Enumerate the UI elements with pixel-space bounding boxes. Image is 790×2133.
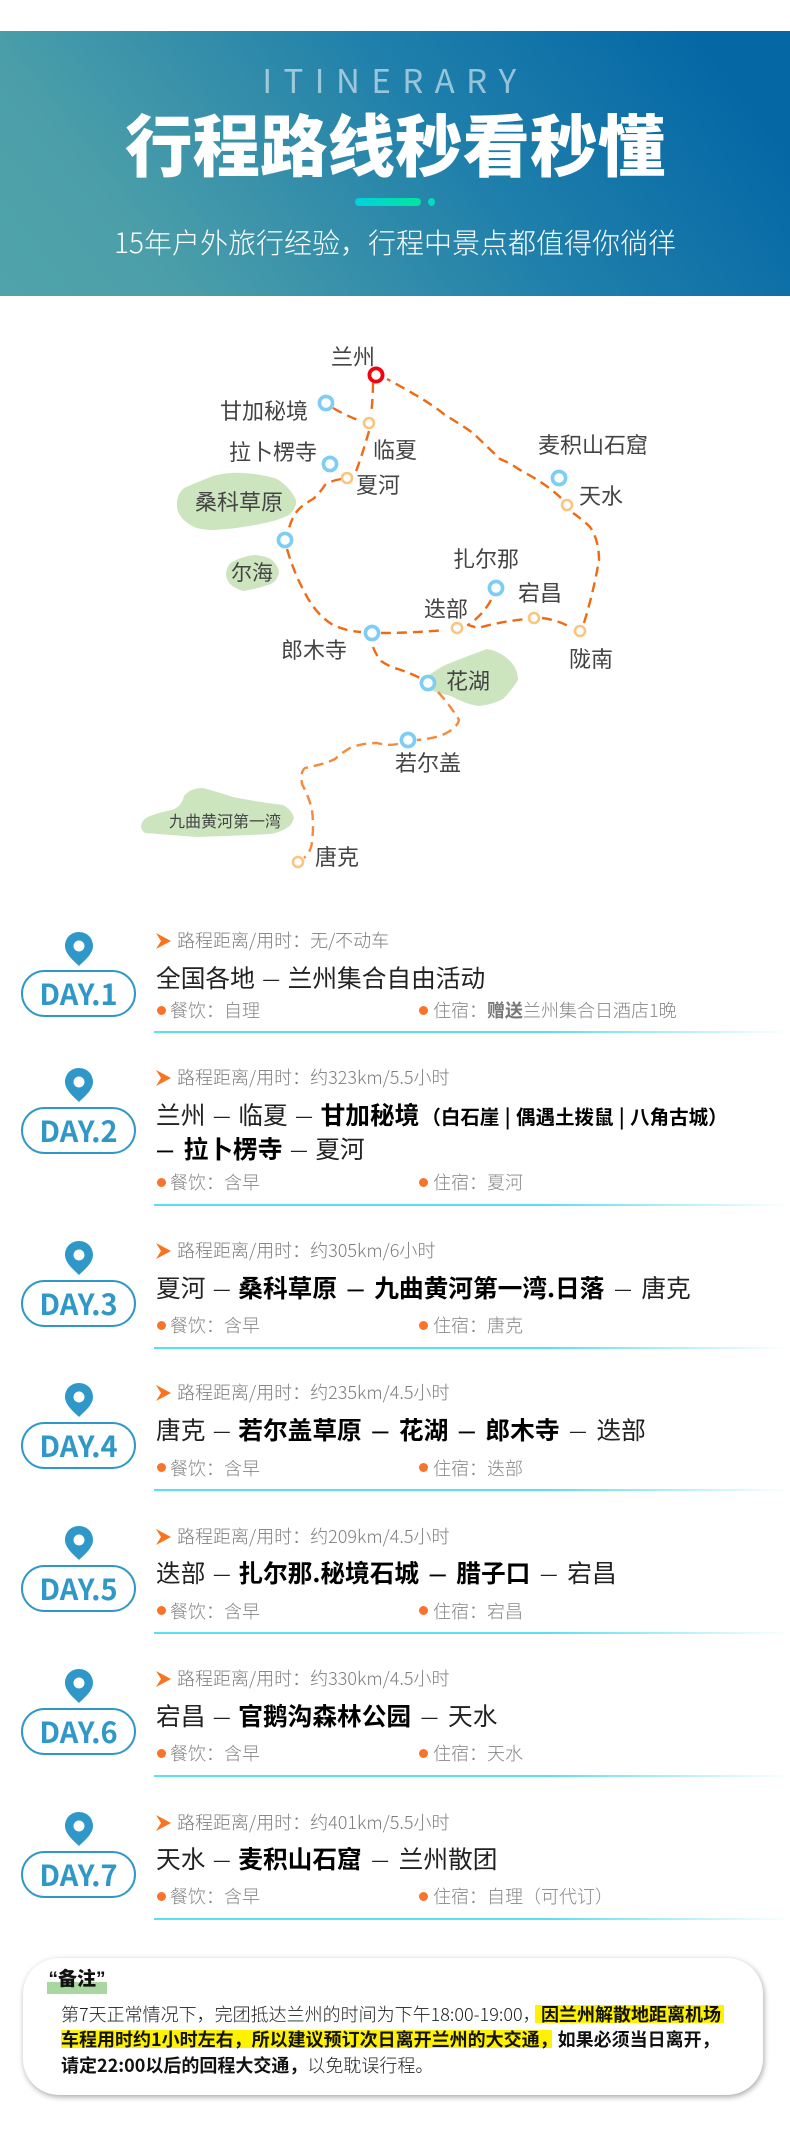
stay dot bbox=[419, 1749, 428, 1758]
panel: day 3 bbox=[21, 1237, 778, 1349]
itinerary: — bbox=[213, 1844, 231, 1873]
icon: arrow bbox=[156, 1671, 171, 1687]
lodging: 住宿：夏河 bbox=[433, 1169, 523, 1195]
route distance: 路程距离/用时：约305km/6小时 bbox=[177, 1237, 435, 1263]
label: 天水: 天水 bbox=[579, 479, 623, 511]
icon: location pin bbox=[65, 1068, 93, 1102]
lodging: 住宿：自理（可代订） bbox=[433, 1883, 613, 1909]
meal dot bbox=[157, 1006, 166, 1015]
accent bar bbox=[355, 198, 421, 206]
itinerary: — bbox=[569, 1415, 587, 1444]
itinerary: — bbox=[614, 1273, 632, 1302]
icon: location pin bbox=[65, 1669, 93, 1703]
node: 尔海 bbox=[278, 533, 292, 547]
panel: day 7 bbox=[21, 1809, 778, 1920]
itinerary line 2: 拉卜楞寺 夏河 bbox=[184, 1130, 365, 1166]
meal dot bbox=[157, 1606, 166, 1615]
itinerary: — bbox=[213, 1415, 231, 1444]
label: 郎木寺: 郎木寺 bbox=[281, 633, 347, 665]
itinerary: — bbox=[371, 1415, 389, 1444]
itinerary: 夏河 桑科草原 九曲黄河第一湾.日落 唐克 bbox=[156, 1269, 691, 1305]
meal dot bbox=[157, 1321, 166, 1330]
stay dot bbox=[419, 1321, 428, 1330]
route distance: 路程距离/用时：约209km/4.5小时 bbox=[177, 1523, 449, 1549]
meals: 餐饮：含早 bbox=[170, 1169, 260, 1195]
region: 桑科草原 bbox=[177, 473, 296, 530]
day badge bbox=[21, 970, 136, 1017]
itinerary: 唐克 若尔盖草原 花湖 郎木寺 迭部 bbox=[156, 1411, 646, 1447]
icon: arrow bbox=[156, 1243, 171, 1259]
meals: 餐饮：自理 bbox=[170, 997, 260, 1023]
lodging: 住宿：迭部 bbox=[433, 1455, 523, 1481]
subtitle: 15年户外旅行经验，行程中景点都值得你徜徉 bbox=[114, 222, 676, 262]
icon: location pin bbox=[65, 1526, 93, 1560]
node: 宕昌 bbox=[529, 613, 539, 623]
node: 麦积山石窟 bbox=[552, 471, 566, 485]
meal dot bbox=[157, 1892, 166, 1901]
node: 郎木寺 bbox=[365, 626, 379, 640]
panel: day 6 bbox=[21, 1665, 778, 1777]
itinerary line 1: — bbox=[295, 1100, 313, 1129]
meal dot bbox=[157, 1463, 166, 1472]
day badge bbox=[21, 1851, 136, 1898]
node: 天水 bbox=[562, 500, 572, 510]
icon: arrow bbox=[156, 1529, 171, 1545]
node: 花湖 bbox=[421, 676, 435, 690]
region: 尔海: 尔海 bbox=[231, 557, 273, 587]
panel: day 1 bbox=[21, 927, 778, 1033]
label: 夏河: 夏河 bbox=[356, 468, 400, 500]
meal dot bbox=[157, 1178, 166, 1187]
label: 拉卜楞寺: 拉卜楞寺 bbox=[229, 435, 317, 467]
node: 夏河 bbox=[342, 473, 352, 483]
label: 临夏: 临夏 bbox=[373, 433, 417, 465]
note line 2: 车程用时约1小时左右，所以建议预订次日离开兰州的大交通，如果必须当日离开， bbox=[61, 2026, 720, 2052]
panel: day 5 bbox=[21, 1523, 778, 1634]
notes heading: “备注” bbox=[48, 1969, 106, 1990]
stay dot bbox=[419, 1892, 428, 1901]
label: 唐克: 唐克 bbox=[315, 840, 359, 872]
region: 九曲黄河第一湾: 九曲黄河第一湾 bbox=[169, 808, 281, 832]
place labels bbox=[220, 340, 648, 872]
icon: location pin bbox=[65, 1241, 93, 1275]
node: 临夏 bbox=[364, 418, 374, 428]
dashed route line bbox=[287, 379, 599, 858]
english heading: ITINERARY bbox=[262, 55, 528, 103]
itinerary: — bbox=[371, 1844, 389, 1873]
label: 兰州: 兰州 bbox=[331, 340, 375, 372]
meals: 餐饮：含早 bbox=[170, 1312, 260, 1338]
note line 3: 请定22:00以后的回程大交通，以免耽误行程。 bbox=[61, 2052, 433, 2078]
icon: arrow bbox=[156, 1070, 171, 1086]
meal dot bbox=[157, 1749, 166, 1758]
stay dot bbox=[419, 1178, 428, 1187]
stop nodes bbox=[278, 368, 585, 867]
highlight line 1 bbox=[535, 2005, 724, 2023]
notes heading highlight bbox=[47, 1982, 107, 1994]
day badge bbox=[21, 1107, 136, 1154]
day badge: DAY.7 bbox=[39, 1853, 118, 1895]
itinerary: — bbox=[540, 1558, 558, 1587]
meals: 餐饮：含早 bbox=[170, 1883, 260, 1909]
day badge: DAY.1 bbox=[39, 972, 118, 1014]
itinerary: — bbox=[421, 1701, 438, 1730]
label: 陇南: 陇南 bbox=[569, 642, 613, 674]
itinerary line 2: — bbox=[156, 1134, 174, 1163]
itinerary line 2: — bbox=[290, 1134, 308, 1163]
panel: notes: 因兰州解散地距离机场 bbox=[541, 2001, 721, 2027]
panel: day 4 bbox=[21, 1379, 778, 1491]
stay dot bbox=[419, 1463, 428, 1472]
day badge bbox=[21, 1708, 136, 1755]
accent dot bbox=[428, 198, 435, 206]
header banner bbox=[0, 31, 790, 296]
region: 尔海 bbox=[226, 555, 279, 591]
icon: arrow bbox=[156, 1385, 171, 1401]
node: 迭部 bbox=[452, 623, 462, 633]
day badge: DAY.3 bbox=[39, 1282, 118, 1324]
label: 麦积山石窟: 麦积山石窟 bbox=[538, 428, 648, 460]
day badge bbox=[21, 1565, 136, 1612]
itinerary: — bbox=[213, 1273, 231, 1302]
node: 拉卜楞寺 bbox=[323, 457, 337, 471]
itinerary: 宕昌 官鹅沟森林公园 天水 bbox=[156, 1697, 497, 1733]
itinerary: — bbox=[213, 1701, 231, 1730]
route distance: 路程距离/用时：约401km/5.5小时 bbox=[177, 1809, 449, 1835]
icon: location pin bbox=[65, 932, 93, 966]
itinerary: — bbox=[213, 1558, 231, 1587]
itinerary: — bbox=[262, 962, 280, 992]
route map bbox=[141, 340, 648, 872]
meals: 餐饮：含早 bbox=[170, 1740, 260, 1766]
itinerary: — bbox=[458, 1415, 476, 1444]
itinerary line 1: 兰州 临夏 甘加秘境（白石崖 | 偶遇土拨鼠 | 八角古城） bbox=[156, 1096, 728, 1132]
highlight line 2 bbox=[61, 2030, 552, 2048]
lodging: 住宿：赠送兰州集合日酒店1晚 bbox=[433, 997, 677, 1023]
node: 扎尔那 bbox=[489, 581, 503, 595]
route distance: 路程距离/用时：无/不动车 bbox=[177, 927, 389, 953]
lodging: 住宿：唐克 bbox=[433, 1312, 523, 1338]
day badge: DAY.2 bbox=[39, 1109, 118, 1151]
region: 花湖: 花湖 bbox=[446, 664, 490, 696]
icon: location pin bbox=[65, 1383, 93, 1417]
itinerary: — bbox=[347, 1273, 365, 1302]
node: 唐克 bbox=[293, 857, 303, 867]
itinerary line 1: — bbox=[213, 1100, 231, 1129]
itinerary: 天水 麦积山石窟 兰州散团 bbox=[156, 1840, 497, 1876]
label: 甘加秘境: 甘加秘境 bbox=[220, 394, 308, 426]
day badge: DAY.6 bbox=[39, 1710, 118, 1752]
note line 1: 第7天正常情况下，完团抵达兰州的时间为下午18:00-19:00， bbox=[61, 2001, 541, 2027]
panel: notes bbox=[23, 1958, 763, 2095]
icon: arrow bbox=[156, 1815, 171, 1831]
day badge bbox=[21, 1280, 136, 1327]
region: 花湖 bbox=[423, 649, 518, 706]
route distance: 路程距离/用时：约330km/4.5小时 bbox=[177, 1665, 449, 1691]
node: 陇南 bbox=[575, 626, 585, 636]
meals: 餐饮：含早 bbox=[170, 1598, 260, 1624]
label: 若尔盖: 若尔盖 bbox=[395, 746, 461, 778]
label: 迭部: 迭部 bbox=[424, 592, 468, 624]
route distance: 路程距离/用时：约323km/5.5小时 bbox=[177, 1064, 449, 1090]
label: 宕昌: 宕昌 bbox=[518, 576, 562, 608]
stay dot bbox=[419, 1006, 428, 1015]
title: 行程路线秒看秒懂 bbox=[125, 94, 665, 191]
icon: location pin bbox=[65, 1812, 93, 1846]
lodging: 住宿：宕昌 bbox=[433, 1598, 523, 1624]
panel: day 2 bbox=[21, 1064, 778, 1206]
itinerary: 迭部 扎尔那.秘境石城 腊子口 宕昌 bbox=[156, 1554, 617, 1590]
meals: 餐饮：含早 bbox=[170, 1455, 260, 1481]
node: 兰州 bbox=[369, 368, 383, 382]
day badge bbox=[21, 1422, 136, 1469]
route distance: 路程距离/用时：约235km/4.5小时 bbox=[177, 1379, 449, 1405]
day badge: DAY.4 bbox=[39, 1424, 118, 1466]
node: 甘加秘境 bbox=[319, 396, 333, 410]
day badge: DAY.5 bbox=[39, 1567, 118, 1609]
itinerary: — bbox=[429, 1558, 447, 1587]
label: 扎尔那: 扎尔那 bbox=[453, 542, 519, 574]
region: 桑科草原: 桑科草原 bbox=[195, 485, 283, 517]
stay dot bbox=[419, 1606, 428, 1615]
itinerary: 全国各地 兰州集合自由活动 bbox=[156, 958, 485, 994]
region: 九曲黄河第一湾 bbox=[141, 788, 294, 837]
lodging: 住宿：天水 bbox=[433, 1740, 523, 1766]
node: 若尔盖 bbox=[401, 733, 415, 747]
icon: arrow bbox=[156, 933, 171, 949]
